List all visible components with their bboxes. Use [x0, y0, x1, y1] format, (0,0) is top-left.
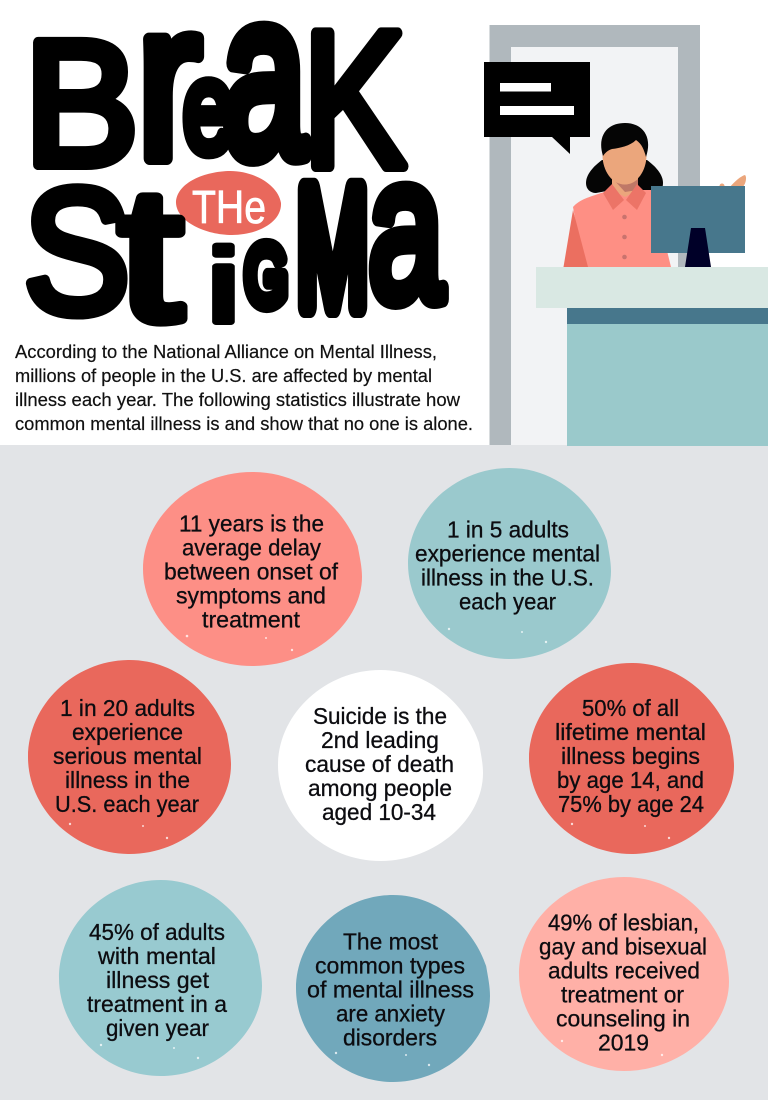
title word: Break: e: [183, 36, 234, 180]
stat bubble: 1 in 20 adults: U.S. each year: [55, 791, 199, 817]
stat bubble: 1 in 20 adults: [28, 660, 231, 854]
reception desk: [536, 267, 768, 446]
stat bubble: 45% get treatment: treatment in a: [87, 991, 228, 1017]
stat bubble: 50% by age 14: [529, 663, 734, 854]
stat bubble: 1 in 20 adults: experience: [72, 719, 183, 745]
stat bubble: 49% LGB adults: treatment or: [561, 982, 684, 1008]
stat bubble: suicide: among people: [308, 775, 452, 801]
stat bubble: 49% LGB adults: 49% of lesbian,: [548, 910, 699, 936]
title word: Stigma: a: [368, 113, 444, 343]
intro text block: illness each year. The following statistics illustrate how: [15, 389, 461, 410]
stat bubble: 50% by age 14: lifetime mental: [555, 719, 706, 745]
stat bubble: 49% LGB adults: 2019: [598, 1030, 649, 1056]
stat bubble: 11 years delay: treatment: [202, 606, 300, 632]
stat bubble: 11 years delay: average delay: [182, 534, 321, 560]
title word: Stigma: i: [206, 227, 240, 344]
stat bubble: 11 years delay: [143, 472, 362, 666]
receptionist figure: [564, 123, 746, 267]
title word: Stigma: t: [119, 150, 182, 360]
title word: Stigma: M: [297, 154, 368, 343]
stat bubble: 50% by age 14: 75% by age 24: [558, 791, 704, 817]
stat bubble: suicide: [278, 670, 483, 861]
stat bubble: 45% get treatment: given year: [106, 1015, 209, 1041]
stat bubble: 45% get treatment: with mental: [97, 943, 216, 969]
door frame: [490, 25, 700, 445]
stat bubble: suicide: cause of death: [305, 751, 454, 777]
illustration: receptionist at a desk: [484, 25, 768, 446]
title word: the, in a coral oval: [176, 171, 281, 235]
stat bubble: 45% get treatment: 45% of adults: [89, 919, 225, 945]
intro text block: common mental illness is and show that no one is alone.: [15, 413, 473, 434]
stat bubble: 1 in 20 adults: serious mental: [53, 743, 202, 769]
stat bubble: anxiety disorders: [296, 895, 490, 1082]
stat bubble: 49% LGB adults: [519, 877, 729, 1071]
stat bubble: anxiety disorders: disorders: [343, 1024, 437, 1050]
stat bubble: 50% by age 14: illness begins: [561, 743, 700, 769]
stat bubble: anxiety disorders: of mental illness: [307, 976, 474, 1002]
stat bubble: 50% by age 14: 50% of all: [582, 695, 679, 721]
stat bubble: 49% LGB adults: gay and bisexual: [539, 934, 707, 960]
stat bubble: 1 in 20 adults: 1 in 20 adults: [60, 695, 195, 721]
stat bubble: 1 in 5 adults: experience mental: [415, 540, 600, 566]
stat bubble: 11 years delay: 11 years is the: [179, 510, 324, 536]
title word: Stigma: S: [23, 152, 130, 350]
stat bubble: suicide: 2nd leading: [321, 727, 439, 753]
stat bubble: 1 in 5 adults: 1 in 5 adults: [447, 516, 569, 542]
stat bubble: suicide: aged 10-34: [322, 799, 436, 825]
stat bubble: 49% LGB adults: adults received: [548, 958, 700, 984]
stat bubble: 50% by age 14: by age 14, and: [557, 767, 704, 793]
stat bubble: anxiety disorders: are anxiety: [336, 1000, 445, 1026]
stat bubble: 45% get treatment: illness get: [106, 967, 209, 993]
title word: Stigma: [23, 113, 444, 360]
intro text block: millions of people in the U.S. are affected by mental: [15, 365, 432, 386]
title word: Break: B: [24, 5, 139, 203]
stat bubble: anxiety disorders: The most: [343, 928, 438, 954]
title word: the, in a coral oval: THe: [192, 181, 266, 233]
stat bubble: 1 in 5 adults: each year: [459, 588, 556, 614]
stat bubble: anxiety disorders: common types: [315, 952, 465, 978]
stat bubble: 1 in 5 adults: illness in the U.S.: [421, 564, 594, 590]
title word: Stigma: G: [245, 229, 288, 323]
stat bubble: 11 years delay: between onset of: [164, 558, 338, 584]
computer monitor: [651, 186, 745, 267]
stat bubble: 1 in 5 adults: [408, 468, 611, 659]
intro text block: According to the National Alliance on Mental Illness,: [15, 341, 437, 362]
stat bubble: 1 in 20 adults: illness in the: [65, 767, 190, 793]
speech bubble icon: [484, 62, 590, 154]
title word: Break: [24, 0, 406, 208]
intro text block: [15, 341, 473, 434]
stat bubble: 49% LGB adults: counseling in: [556, 1006, 690, 1032]
stat bubble: suicide: Suicide is the: [313, 703, 447, 729]
stat bubble: 11 years delay: symptoms and: [176, 582, 326, 608]
title: Break the Stigma: [23, 0, 444, 360]
stat bubble: 45% get treatment: [59, 880, 262, 1076]
